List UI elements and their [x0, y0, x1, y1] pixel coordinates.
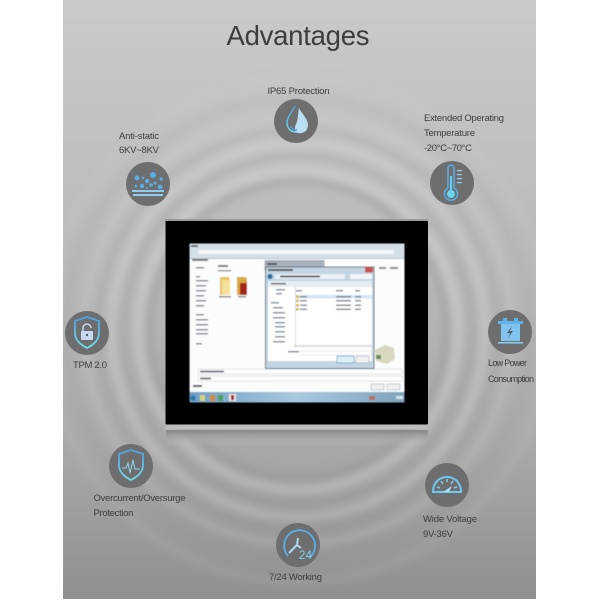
icon: clock 24: 24 — [299, 550, 313, 562]
decoration — [375, 345, 395, 364]
icon: thermometer — [430, 161, 474, 205]
feature: Low Power Consumption: Low Power — [488, 358, 527, 368]
taskbar — [190, 392, 404, 402]
folders — [220, 277, 230, 295]
feature: Extended Operating Temperature: Temperature — [424, 128, 475, 139]
feature: Anti-static: 6KV~8KV — [119, 145, 160, 156]
dialog behind — [265, 260, 324, 270]
feature: Low Power Consumption: Consumption — [488, 374, 534, 384]
icon: shield lock — [65, 311, 109, 355]
feature: TPM 2.0: TPM 2.0 — [73, 360, 107, 371]
feature: 7/24 Working: 7/24 Working — [269, 572, 322, 583]
feature: Overcurrent/Oversurge Protection — [94, 444, 186, 519]
feature: Low Power Consumption — [488, 310, 534, 384]
feature: Overcurrent/Oversurge Protection: Overcurrent/Oversurge — [94, 493, 186, 504]
monitor — [165, 219, 428, 446]
sidebar lines — [196, 267, 208, 344]
feature: Overcurrent/Oversurge Protection: Protection — [94, 508, 134, 519]
feature: Extended Operating Temperature — [424, 113, 504, 205]
feature: Wide Voltage — [423, 463, 477, 540]
feature: Anti-static: Anti-static — [119, 131, 159, 142]
icon: water drop — [274, 99, 318, 143]
icon: gauge — [425, 463, 469, 507]
feature: Wide Voltage: Wide Voltage — [423, 514, 477, 525]
feature: Anti-static — [119, 131, 170, 206]
bottom fields — [198, 369, 402, 374]
feature: Wide Voltage: 9V-36V — [423, 529, 454, 540]
title: Advantages — [226, 20, 370, 51]
feature: Extended Operating Temperature: -20°C~70°C — [424, 143, 472, 154]
feature: TPM 2.0 — [65, 311, 109, 371]
icon: shield with wave — [109, 444, 153, 488]
icon: battery — [488, 310, 532, 354]
dialog — [266, 267, 374, 368]
feature: IP65 Protection: IP65 Protection — [268, 86, 330, 97]
feature: IP65 Protection — [268, 86, 330, 143]
screen — [190, 244, 404, 402]
feature: 7/24 Working — [269, 523, 322, 583]
icon: particles — [126, 162, 170, 206]
feature: Extended Operating Temperature: Extended Operating — [424, 113, 504, 124]
